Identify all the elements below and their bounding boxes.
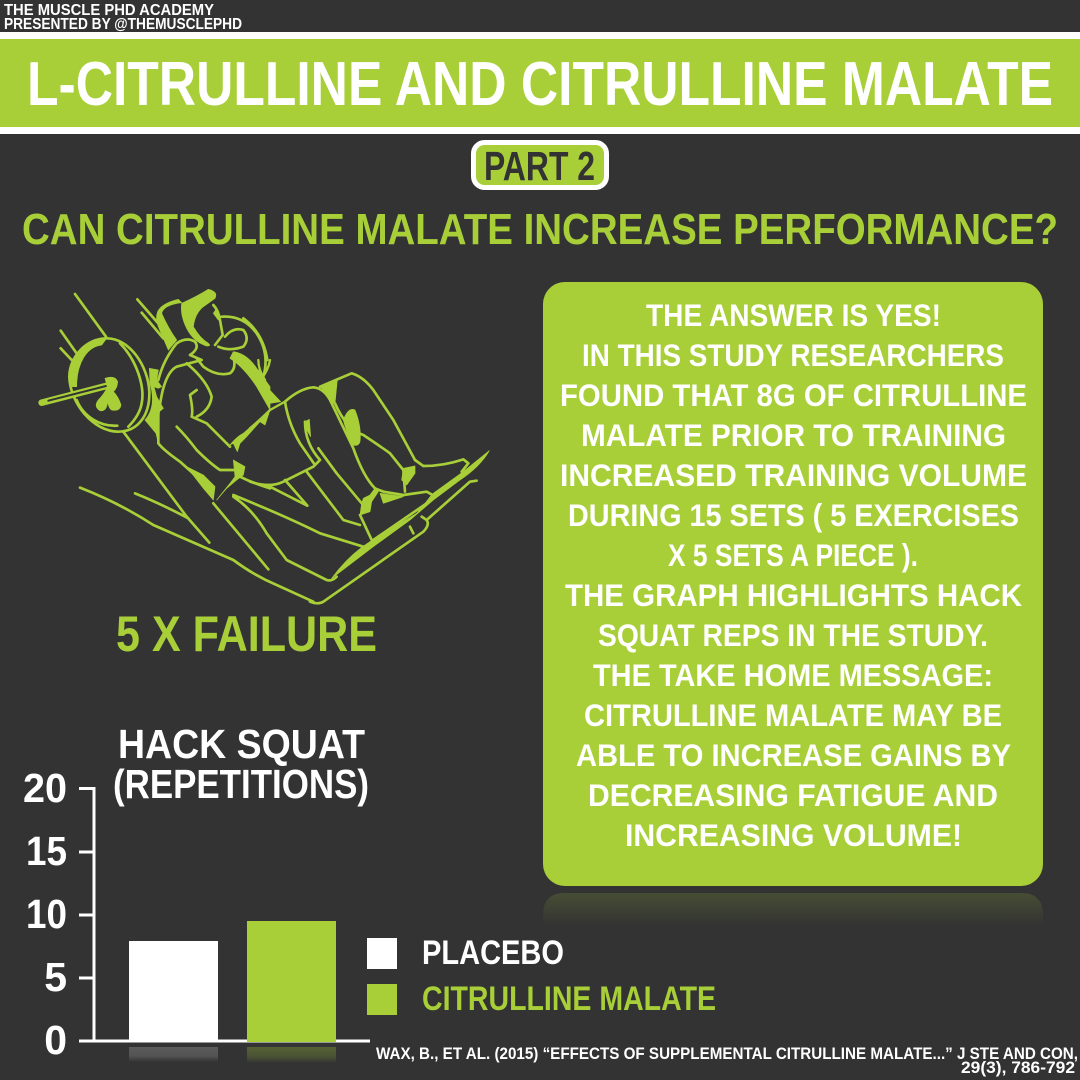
chart title: HACK SQUAT	[118, 721, 365, 767]
panel: study summary: IN THIS STUDY RESEARCHERS	[582, 337, 1004, 373]
chart title	[113, 721, 369, 807]
panel: study summary: THE ANSWER IS YES!	[646, 297, 941, 333]
panel: study summary: INCREASING VOLUME!	[625, 817, 962, 853]
panel: study summary: SQUAT REPS IN THE STUDY.	[598, 617, 988, 653]
chart: hack squat repetitions	[23, 721, 370, 1063]
academy credit	[4, 2, 242, 33]
y axis labels: 0	[44, 1017, 67, 1063]
title banner	[0, 32, 1080, 134]
academy credit: PRESENTED BY @THEMUSCLEPHD	[4, 16, 242, 33]
bar: placebo	[129, 941, 218, 1042]
panel: study summary: FOUND THAT 8G OF CITRULLINE	[560, 377, 1027, 413]
y axis labels: 10	[26, 891, 67, 937]
legend: CITRULLINE MALATE	[422, 980, 716, 1018]
axes	[79, 788, 370, 1041]
legend	[367, 934, 716, 1018]
panel: study summary: ABLE TO INCREASE GAINS BY	[576, 737, 1011, 773]
academy credit: THE MUSCLE PHD ACADEMY	[4, 2, 215, 19]
panel: study summary: CITRULLINE MALATE MAY BE	[584, 697, 1002, 733]
panel: study summary: X 5 SETS A PIECE ).	[668, 537, 918, 573]
panel: study summary: DURING 15 SETS ( 5 EXERCISES	[568, 497, 1019, 533]
y axis labels	[23, 765, 67, 1063]
panel: study summary: INCREASED TRAINING VOLUME	[560, 457, 1027, 493]
panel: study summary: DECREASING FATIGUE AND	[588, 777, 998, 813]
part 2 badge: PART 2	[484, 143, 595, 189]
citation: 29(3), 786-792	[961, 1058, 1075, 1077]
panel reflection	[543, 893, 1043, 926]
panel: study summary: MALATE PRIOR TO TRAINING	[581, 417, 1006, 453]
chart title: (REPETITIONS)	[113, 761, 369, 807]
legend: PLACEBO	[422, 934, 564, 972]
bar reflections	[129, 1047, 336, 1063]
bar: citrulline malate	[247, 921, 336, 1042]
icon: athlete on hack squat machine	[42, 289, 489, 603]
citation	[376, 1044, 1078, 1077]
sets label: 5 X FAILURE	[116, 606, 377, 662]
panel: study summary: THE TAKE HOME MESSAGE:	[593, 657, 993, 693]
y axis labels: 20	[23, 765, 67, 811]
y axis labels: 5	[44, 954, 67, 1000]
y axis labels: 15	[26, 828, 67, 874]
panel: study summary: THE GRAPH HIGHLIGHTS HACK	[565, 577, 1022, 613]
panel: study summary	[543, 282, 1043, 886]
